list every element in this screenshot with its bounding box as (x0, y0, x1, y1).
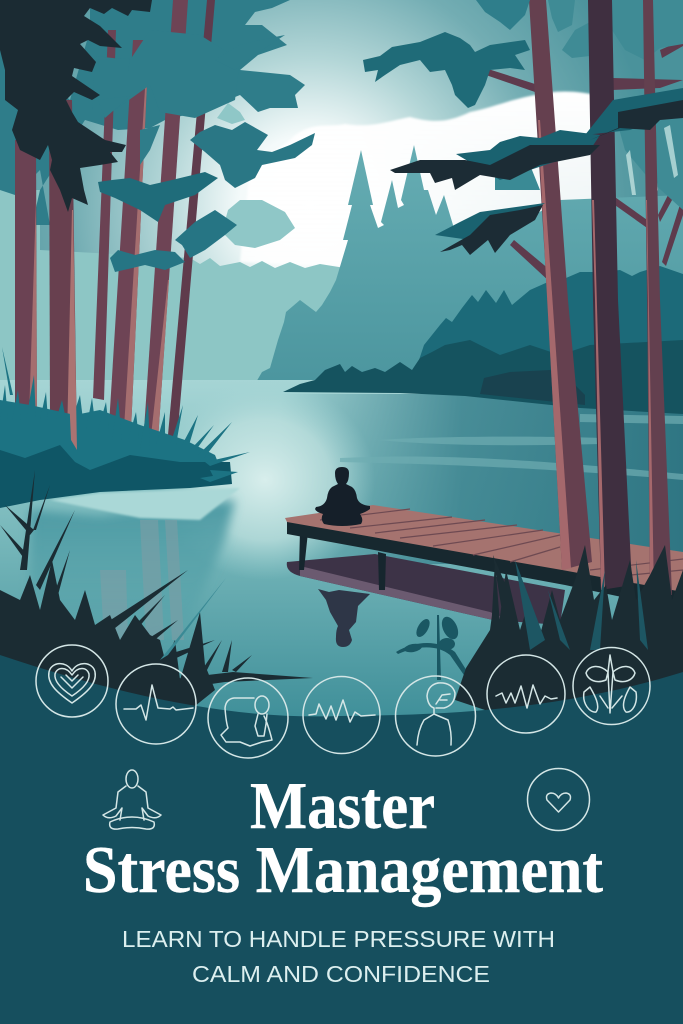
right frond dark (590, 100, 683, 140)
left tree trunks (15, 0, 215, 450)
patch over trunks (92, 30, 240, 118)
icon: flower (573, 648, 650, 724)
dock reflection (287, 554, 565, 647)
right trunk 3 (643, 0, 672, 595)
lake (0, 380, 683, 720)
title line one: Master (250, 769, 435, 843)
icon: person with thought (396, 676, 476, 756)
dark canopy (0, 0, 152, 212)
teal blade (160, 578, 226, 660)
meditating figure (315, 467, 370, 526)
right foliage far (548, 0, 683, 60)
trunk 2 (49, 100, 77, 450)
bottom teal panel (0, 655, 683, 1024)
icon: pulse two (303, 676, 380, 754)
bank upper (0, 400, 225, 500)
feather tips (98, 35, 285, 165)
right tree trunks (363, 0, 683, 595)
dock (285, 505, 683, 610)
bank lower (0, 445, 232, 508)
darker shore shrub (480, 370, 585, 405)
subtitle line one: LEARN TO HANDLE PRESSURE WITH (122, 926, 555, 952)
pale gaps (626, 125, 678, 195)
subtitle line two: CALM AND CONFIDENCE (192, 961, 490, 987)
grass blades (0, 347, 250, 482)
icon: meditating person outline (103, 770, 161, 829)
dock front fascia (287, 520, 683, 610)
left foreground reeds (0, 470, 313, 710)
icon: small heart (528, 768, 590, 830)
tree reflections in lake (100, 520, 184, 640)
trunk 3 (93, 30, 116, 400)
frond cluster low (175, 210, 237, 258)
subtitle (122, 926, 555, 987)
icon: pulse three (487, 655, 565, 733)
trunk 1 (15, 140, 37, 420)
mid frond dark (390, 145, 600, 190)
frond cluster right (190, 122, 315, 188)
trunk 4 (109, 40, 149, 430)
lake light patch (155, 380, 375, 580)
frond cluster lowest (110, 250, 185, 272)
lower frond dark (440, 205, 543, 255)
right top frond (476, 0, 530, 30)
teal canopy behind trees (0, 0, 305, 225)
branches (483, 40, 683, 282)
right foreground reeds (455, 545, 683, 715)
frond cluster centre (98, 172, 218, 222)
left bank reflection (30, 500, 235, 650)
lake dark right side (280, 394, 683, 564)
distant fir trees and hazy tree mass (255, 145, 683, 400)
trunk 6 (168, 0, 215, 440)
teal reed blades (515, 560, 648, 650)
icon row (36, 645, 650, 830)
bright strip under bank (50, 488, 240, 520)
far light shoreline (0, 190, 345, 400)
right upper frond (363, 32, 530, 108)
left grassy bank (0, 347, 250, 508)
centre plant (396, 614, 470, 680)
trunk 5 (144, 0, 188, 440)
water bands (340, 414, 683, 480)
cloud bank (240, 92, 600, 270)
frond shade under (495, 165, 540, 190)
right frond teal (585, 88, 683, 135)
dock deck (285, 505, 683, 592)
right forest bushes (415, 266, 683, 420)
left foliage clusters (92, 30, 315, 272)
title (83, 769, 604, 907)
icon: pulse one (116, 664, 196, 744)
mid frond teal (456, 130, 600, 180)
right mid foliage (618, 100, 683, 210)
meditator reflection (318, 589, 370, 647)
right island shoreline (283, 340, 683, 414)
trunk base overlap (69, 395, 77, 450)
deck plank lines (320, 509, 683, 578)
lower frond teal (435, 203, 545, 240)
dock legs (299, 530, 386, 590)
pale distant foliage (217, 103, 295, 248)
icon: heart (36, 645, 108, 717)
icon: head and shoulders (208, 678, 288, 758)
title line two: Stress Management (83, 833, 604, 907)
right trunk 1 (529, 0, 592, 570)
sky background (0, 0, 683, 400)
right trunk 2 (588, 0, 632, 590)
